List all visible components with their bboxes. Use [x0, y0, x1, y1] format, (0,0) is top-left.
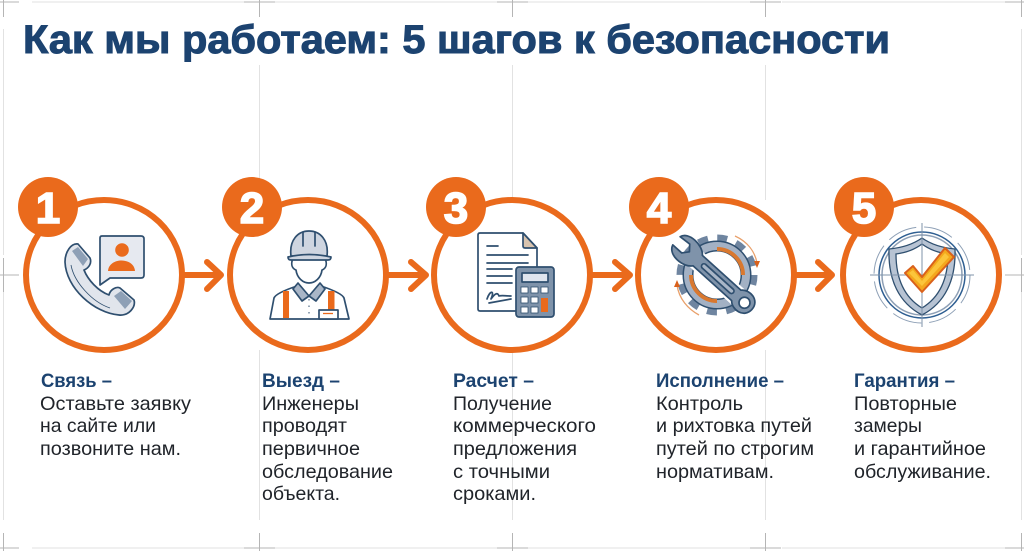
text block: step 4: Контроль: [656, 393, 743, 415]
arrow: step 2 to step 3: [388, 262, 426, 289]
arrow: step 3 to step 4: [593, 262, 630, 289]
arrow: step 1 to step 2: [185, 262, 221, 289]
text block: step 5: Гарантия –: [854, 370, 955, 392]
number badge 4: 4: [647, 184, 672, 233]
text block: step 4: путей по строгим: [656, 438, 814, 460]
circle: step 4: [638, 200, 794, 350]
text block: step 4: и рихтовка путей: [656, 415, 812, 437]
circle: step 5: [843, 200, 999, 350]
circle: step 1: [26, 200, 182, 350]
text block: step 5: и гарантийное: [854, 438, 986, 460]
text block: step 5: [854, 370, 991, 483]
icon: engineer in helmet: [270, 231, 349, 319]
text block: step 3: [453, 370, 596, 505]
icon: wrench and gear: [667, 231, 761, 319]
panel: step 3: [426, 177, 590, 350]
text block: step 1: [40, 370, 191, 460]
panel: step 5: [834, 177, 999, 350]
title: Как мы работаем: 5 шагов к безопасности: [23, 18, 890, 62]
text block: step 3: коммерческого: [453, 415, 596, 437]
panel: step 4: [629, 177, 794, 350]
text block: step 3: предложения: [453, 438, 577, 460]
circle: step 3: [434, 200, 590, 350]
text block: step 4: [656, 370, 814, 483]
text block: step 5: обслуживание.: [854, 461, 991, 483]
text block: step 1: на сайте или: [40, 415, 156, 437]
text block: step 2: объекта.: [262, 483, 340, 505]
text block: step 3: сроками.: [453, 483, 536, 505]
icon: contract and calculator: [478, 233, 554, 317]
number badge 2: 2: [240, 184, 264, 233]
text block: step 1: Оставьте заявку: [40, 393, 191, 415]
number badge 1: 1: [36, 184, 60, 233]
number badge 4: [629, 177, 689, 237]
text block: step 1: Связь –: [41, 370, 112, 392]
number badge 3: 3: [444, 184, 468, 233]
text block: step 2: Выезд –: [262, 370, 340, 392]
text block: step 4: Исполнение –: [656, 370, 784, 392]
number badge 1: [18, 177, 78, 237]
number badge 5: 5: [852, 184, 876, 233]
text block: step 3: Расчет –: [453, 370, 534, 392]
number badge 2: [222, 177, 282, 237]
arrow: step 4 to step 5: [796, 262, 832, 289]
text block: step 1: позвоните нам.: [40, 438, 181, 460]
icon: phone and contact bubble: [65, 236, 144, 315]
text block: step 2: [262, 370, 393, 505]
text block: step 3: с точными: [453, 461, 550, 483]
text block: step 5: замеры: [854, 415, 922, 437]
number badge 3: [426, 177, 486, 237]
panel: step 1: [18, 177, 182, 350]
text block: step 4: нормативам.: [656, 461, 774, 483]
text block: step 5: Повторные: [854, 393, 957, 415]
circle: step 2: [230, 200, 386, 350]
number badge 5: [834, 177, 894, 237]
text block: step 3: Получение: [453, 393, 552, 415]
text block: step 2: Инженеры: [262, 393, 359, 415]
panel: step 2: [222, 177, 386, 350]
text block: step 2: первичное: [262, 438, 360, 460]
text block: step 2: обследование: [262, 461, 393, 483]
text block: step 2: проводят: [262, 415, 347, 437]
icon: shield with check mark: [870, 223, 974, 327]
